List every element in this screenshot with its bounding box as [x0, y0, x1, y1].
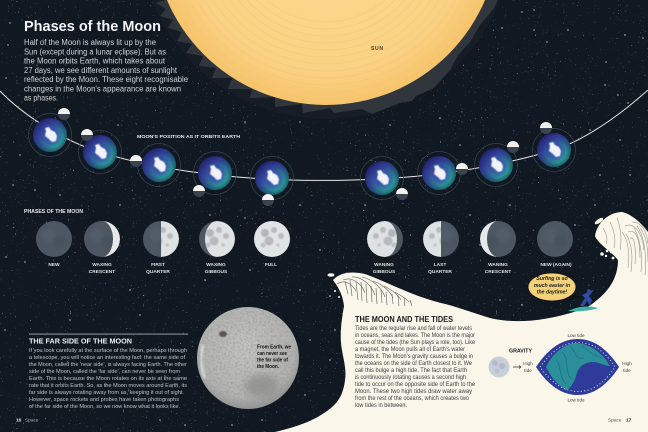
far side heading: THE FAR SIDE OF THE MOON	[29, 336, 132, 346]
earths and moons along orbit	[28, 108, 576, 206]
sun with fringe	[139, 0, 513, 119]
earth 8	[474, 144, 518, 186]
waning gibbous	[367, 221, 403, 257]
phase labels: QUARTER	[146, 269, 170, 275]
tides body text: low tides in between.	[355, 403, 407, 409]
earth 6	[360, 156, 404, 200]
intro text	[24, 38, 189, 103]
far side moon image	[197, 307, 299, 409]
earth 5	[250, 156, 294, 200]
label: orbit position: MOON'S POSITION AS IT ORBITS EARTH	[137, 134, 241, 140]
orbiting moon 9	[540, 122, 552, 134]
folio right: Space	[608, 418, 622, 424]
last quarter	[423, 221, 459, 257]
far side callout	[257, 344, 291, 370]
phase labels: FULL	[265, 262, 277, 268]
folio left: 16	[16, 418, 22, 424]
far side body text	[29, 348, 187, 410]
far side body text: of the far side of the Moon, so we now know what it looks like.	[29, 404, 180, 410]
phase labels: QUARTER	[428, 269, 452, 275]
tides body text: towards it. The Moon's gravity causes a bulge in	[355, 354, 473, 360]
tide labels: High	[523, 361, 533, 366]
phase labels: NEW	[48, 262, 60, 268]
intro text: 27 days, we see different amounts of sunlight	[24, 66, 178, 75]
far side body text: Earth. This is because the Moon rotates on its axis at the same	[29, 376, 187, 382]
far side body text: far side is always rotating away from us, keeping it out of sight.	[29, 390, 184, 396]
tides body text: call this bulge a high tide. The fact that Earth	[355, 368, 467, 374]
orbiting moon 2	[81, 129, 93, 141]
intro text: changes in the Moon's appearance are known	[24, 84, 181, 93]
small wave spray	[328, 273, 340, 298]
far side body text: rate that it orbits Earth. So, as the Moon moves around Earth, its	[29, 383, 187, 389]
intro text: Half of the Moon is always lit up by the	[24, 38, 157, 47]
far side body text: side of the Moon, called the 'far side', can never be seen from	[29, 369, 180, 375]
folio right	[608, 418, 632, 424]
folio right: 17	[626, 418, 632, 424]
tides body text: tide to occur on the opposite side of Earth to the	[355, 382, 476, 388]
tides body text: in oceans, seas and lakes. The Moon is the major	[355, 333, 475, 339]
phase labels: GIBBOUS	[205, 269, 228, 275]
panel: moon and the tides	[355, 315, 476, 409]
phase labels: WAXING	[206, 262, 226, 268]
tides heading: THE MOON AND THE TIDES	[355, 315, 454, 324]
big wave spray	[594, 216, 614, 259]
earth 1	[28, 114, 72, 156]
earth 7	[418, 152, 460, 194]
tides body text	[355, 326, 476, 409]
phase labels: WANING	[488, 262, 508, 268]
label: phases heading: PHASES OF THE MOON	[24, 209, 83, 215]
far side callout: From Earth, we	[257, 344, 291, 350]
earth bulge	[536, 339, 619, 395]
intro text: the Moon orbits Earth, which takes about	[24, 57, 166, 66]
speech bubble	[528, 273, 582, 301]
phase labels: CRESCENT	[485, 269, 511, 275]
tides body text: Tides are the regular rise and fall of water levels	[355, 326, 472, 332]
intro text: reflected by the Moon. These eight recognisable	[24, 75, 189, 84]
orbiting moon 3	[130, 155, 142, 167]
gravity diagram	[488, 333, 632, 402]
far side body text: the Moon, called the 'near side', is always facing Earth. The other	[29, 362, 187, 368]
small moon	[488, 356, 510, 378]
speech bubble: the daytime!	[537, 290, 568, 296]
far side callout: can never see	[257, 351, 287, 357]
waxing gibbous	[199, 221, 235, 257]
panel: far side of the moon	[29, 334, 188, 410]
tides body text: a magnet, the Moon pulls all of Earth's water	[355, 347, 465, 353]
far side callout: the far side of	[257, 358, 288, 364]
tide labels: High	[622, 361, 632, 366]
tides body text: from the rest of the oceans, which creates two	[355, 396, 470, 402]
far side rule	[29, 334, 188, 335]
orbiting moon 7	[456, 163, 468, 175]
phase labels: GIBBOUS	[373, 269, 396, 275]
title: Phases of the Moon	[24, 19, 161, 35]
speech bubble: Surfing is so	[536, 276, 568, 282]
orbiting moon 1	[58, 108, 70, 120]
waning crescent	[480, 221, 516, 257]
tides body text: the oceans on the side of Earth closest to it. We	[355, 361, 473, 367]
tide labels: tide	[524, 368, 532, 373]
tides body text: cause of the tides (the Sun plays a role, too). Like	[355, 340, 476, 346]
orbiting moon 8	[507, 141, 519, 153]
small wave hatching	[337, 277, 412, 306]
phase labels: WANING	[374, 262, 394, 268]
phase labels: FIRST	[151, 262, 165, 268]
gravity label: GRAVITY	[509, 348, 533, 354]
far side body text: If you look carefully at the surface of the Moon, perhaps through	[29, 348, 187, 354]
surfer	[568, 289, 598, 311]
tides body text: Moon. These two high tides draw water away	[355, 389, 472, 395]
tide labels: tide	[623, 368, 631, 373]
tide labels	[523, 333, 632, 402]
earth 9	[532, 128, 576, 172]
big wave hatching	[603, 218, 648, 275]
earth 3	[138, 144, 180, 186]
cream page area with waves	[275, 212, 648, 432]
earth 2	[78, 130, 122, 174]
tide labels: Low tide	[567, 333, 585, 338]
label: sun: SUN	[371, 46, 383, 52]
phase labels: NEW (AGAIN)	[540, 262, 572, 268]
intro text: Sun (except during a lunar eclipse). But as	[24, 47, 166, 56]
intro text: as phases.	[24, 94, 58, 103]
moon phases row	[36, 221, 573, 257]
phase labels: CRESCENT	[89, 269, 115, 275]
speech bubble: much easier in	[534, 283, 570, 289]
orbiting moon 5	[262, 194, 274, 206]
earth 4	[194, 152, 236, 194]
folio left: Space	[25, 418, 39, 424]
far side callout: the Moon.	[257, 364, 279, 370]
phase labels: LAST	[434, 262, 446, 268]
full moon	[254, 221, 290, 257]
orbiting moon 4	[193, 185, 205, 197]
new again	[537, 221, 573, 257]
gravity arrow	[513, 366, 521, 368]
far side body text: a telescope, you will notice an interesting fact: the same side of	[29, 355, 185, 361]
orbiting moon 6	[396, 188, 408, 200]
first quarter	[143, 221, 179, 257]
far side body text: However, space rockets and probes have taken photographs	[29, 397, 179, 403]
folio left	[16, 418, 39, 424]
tide labels: Low tide	[567, 398, 585, 402]
waxing crescent	[84, 221, 120, 257]
new moon	[36, 221, 72, 257]
tides body text: is continuously rotating causes a second high	[355, 375, 466, 381]
phase labels: WAXING	[92, 262, 112, 268]
orbit path	[0, 90, 648, 180]
phase labels	[48, 262, 572, 275]
